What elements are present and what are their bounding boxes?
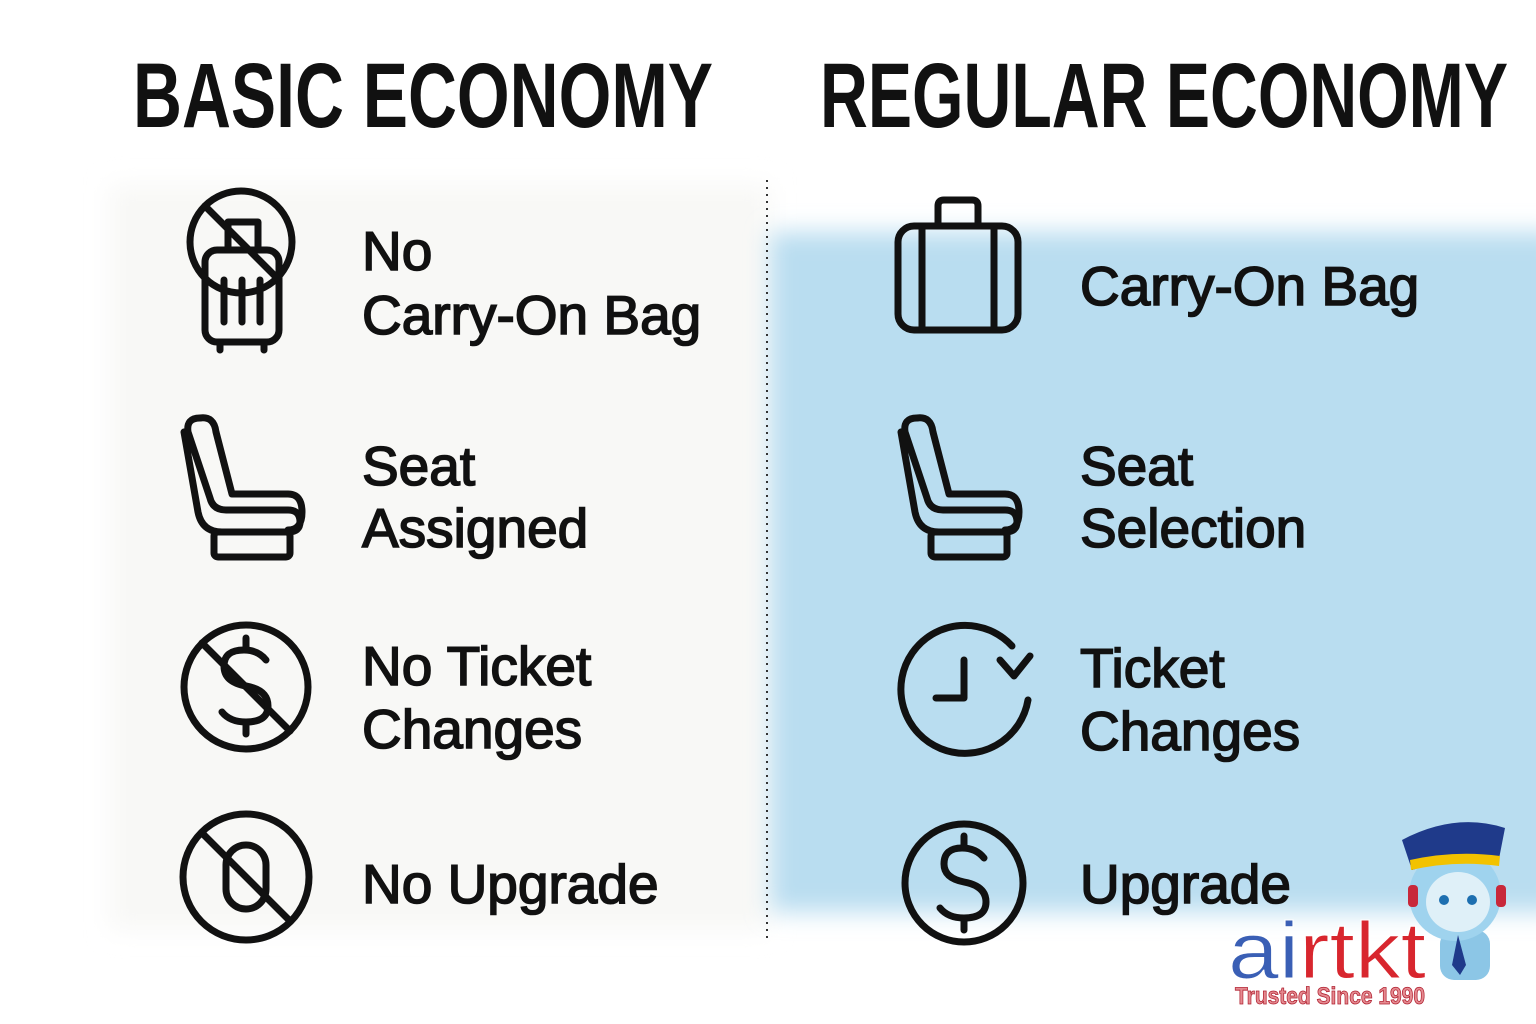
logo: airtkt: airtkt (1228, 906, 1426, 995)
text: no ticket changes: Changes (362, 698, 582, 760)
icon: carry-on bag (898, 200, 1018, 330)
icon: ticket changes clock (901, 625, 1030, 753)
panel: regular economy background (770, 232, 1536, 912)
title: basic economy: BASIC ECONOMY (133, 45, 713, 147)
text: ticket changes: Ticket (1080, 637, 1225, 699)
panel: basic economy background (110, 185, 770, 930)
icon: seat assigned (184, 418, 302, 557)
text: no ticket changes: No Ticket (362, 635, 591, 697)
text: seat selection: Selection (1080, 497, 1306, 559)
icon: no upgrade (183, 814, 309, 940)
logo: airtkt (1228, 822, 1506, 1010)
icon: no ticket changes (184, 625, 308, 749)
text: upgrade: Upgrade (1080, 853, 1291, 915)
text: seat assigned: Seat (362, 435, 475, 497)
mascot (1402, 822, 1506, 980)
text: carry-on bag: Carry-On Bag (1080, 255, 1419, 317)
divider (766, 180, 768, 940)
icon: upgrade dollar (905, 824, 1023, 942)
text: seat assigned: Assigned (362, 497, 588, 559)
text: ticket changes: Changes (1080, 700, 1300, 762)
text: no carry-on bag: Carry-On Bag (362, 284, 701, 346)
logo: airtkt: Trusted Since 1990 (1235, 983, 1425, 1010)
icon: no carry-on bag (190, 191, 292, 350)
text: seat selection: Seat (1080, 435, 1193, 497)
text: no carry-on bag: No (362, 220, 432, 282)
icon: seat selection (901, 418, 1019, 557)
text: no upgrade: No Upgrade (362, 853, 659, 915)
